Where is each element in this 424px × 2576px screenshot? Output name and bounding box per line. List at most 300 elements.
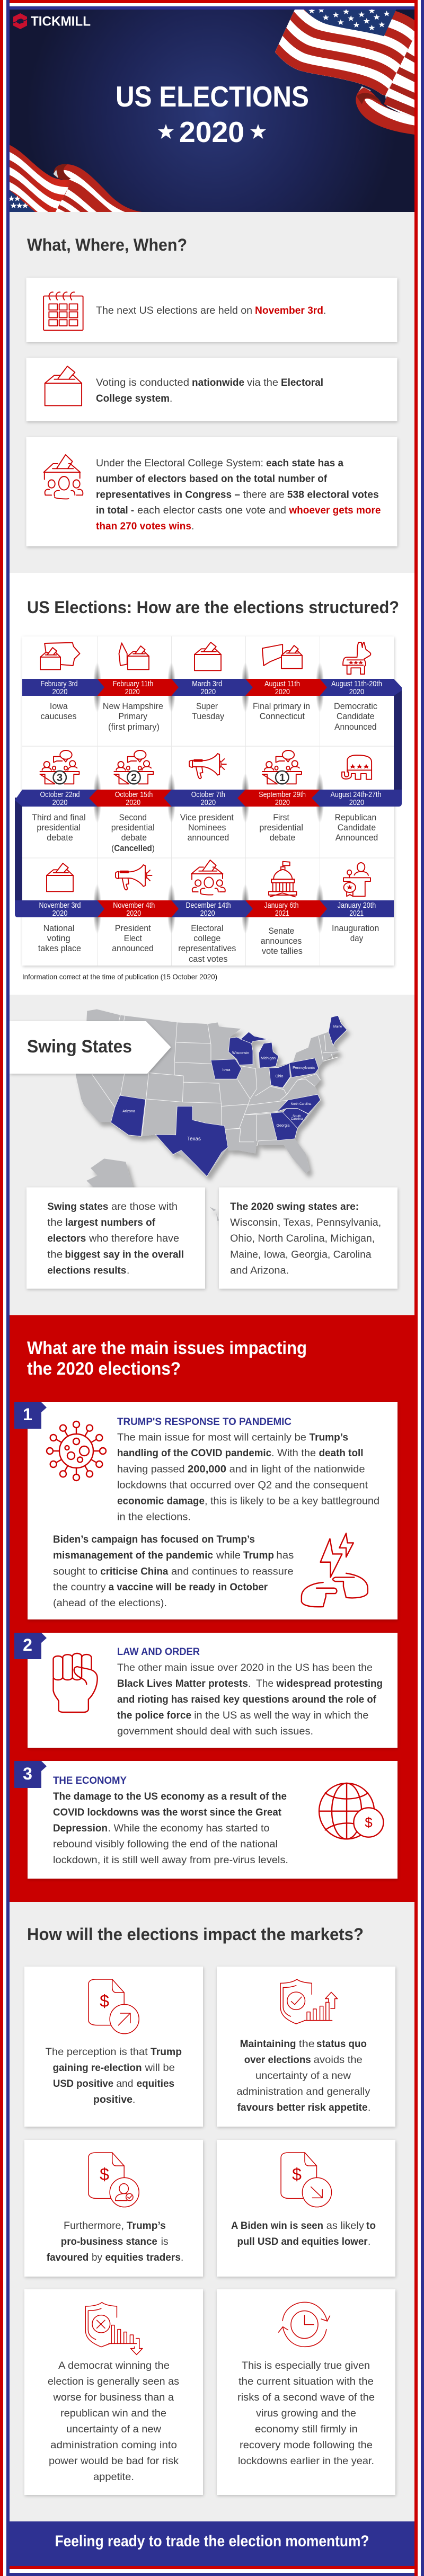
card: swing list: The 2020 swing states are: [230,1201,359,1212]
card: trump re-election: gaining re-election [53,2062,142,2074]
heading: the 2020 elections? [27,1359,181,1379]
captions: row 3: Senate [269,926,294,936]
icon: elephant [342,755,372,780]
text: Black Lives Matter protests [117,1678,248,1689]
heading: What, Where, When? [27,235,187,254]
text: and in light of the nationwide [229,1464,365,1475]
section: what where when [10,212,414,573]
map: gray states [76,1010,339,1176]
text: . With the [271,1448,316,1459]
text: and continues to reassure [171,1566,294,1577]
dates: row 1: February 3rd [40,679,77,688]
icon: capitol [269,862,297,897]
map labels: Michigan [261,1057,276,1060]
map labels: Maine [333,1025,342,1029]
number tab: 1 [23,1405,32,1424]
card: second wave: This is especially true given [242,2360,370,2371]
band: row 2 [15,790,402,807]
card: democrat win: administration coming into [50,2440,177,2451]
captions: row 1: New Hampshire [103,701,163,711]
captions: row 3: Inauguration [332,923,379,933]
icon: calendar [43,292,83,330]
dates: row 3: December 14th [186,901,231,910]
icon: third debate: 3 [57,772,63,784]
icon: Connecticut [262,644,302,669]
captions: row 2: debate [270,833,295,843]
captions: row 2: presidential [111,822,155,833]
text: The next US elections are held on [96,305,252,316]
text: lockdowns that occurred over Q2 and the consequent [117,1480,368,1491]
card: second wave: virus growing and the [256,2408,356,2419]
card: swing definition: largest numbers of [65,1217,156,1228]
card: swing definition: the [47,1217,63,1228]
captions: row 2: Second [119,812,147,822]
text: each elector casts one vote and [137,505,286,516]
card: swing definition: . [127,1265,129,1276]
card: second wave: lockdowns earlier in the year. [238,2456,374,2467]
card: swing list [219,1188,398,1289]
text: in total - [96,505,134,516]
text: economic damage [117,1496,205,1507]
captions: row 1: Connecticut [260,711,305,721]
card: status quo: favours better risk appetite [237,2102,368,2113]
text: while [216,1550,241,1561]
card: status quo: status quo [316,2039,367,2050]
dates: row 2: 2020 [201,798,216,807]
text [53,1791,288,1866]
text: The other main issue over 2020 in the US has been the [117,1662,373,1674]
text: . [323,305,326,316]
title: 2020 [179,116,244,148]
captions: row 3: announced [112,943,154,953]
icon: document down [281,2153,332,2207]
card: democrat win: election is generally seen as [48,2376,179,2387]
captions: row 3 [38,923,379,964]
card: status quo: administration and generally [236,2086,370,2097]
card: swing definition: electors [47,1233,86,1244]
dates: row 3: 2020 [126,909,141,918]
card: second wave: risks of a second wave of the [237,2392,375,2403]
captions: row 1: Tuesday [192,711,225,721]
captions: row 3: takes place [38,943,81,953]
hero banner [10,10,414,212]
text: Depression [53,1823,108,1834]
dates: row 1: August 11th-20th [331,679,382,688]
card: trump re-election: . [132,2094,135,2105]
card: democrat win: power would be bad for risk [49,2456,179,2467]
card: status quo: avoids the [314,2055,363,2066]
text [96,458,381,532]
icon: megaphone [116,865,152,890]
dates: row 2: August 24th-27th [331,790,382,799]
text: rebound visibly following the end of the national [53,1839,278,1850]
icon: globe with dollar [319,1783,383,1839]
card: swing list: and Arizona. [230,1265,289,1276]
dates: row 3: 2020 [200,909,215,918]
dates: row 2: October 7th [191,790,225,799]
card: status quo: Maintaining [240,2039,296,2050]
text: whoever gets more [288,505,381,516]
text: sought to [53,1566,98,1577]
map labels: North Carolina [291,1103,312,1106]
icon: Iowa [40,643,80,670]
icon: megaphone [189,754,226,778]
captions: row 3: National [43,923,74,933]
dates: row 2: 2020 [126,798,140,807]
text: there are [243,490,285,500]
card: pro-business: by [92,2252,102,2263]
text: has [276,1550,294,1561]
card: democrat win: A democrat winning the [58,2360,170,2371]
captions: row 1: Final primary in [253,701,310,711]
card: trump re-election: and [116,2078,133,2090]
card: biden win: . [368,2236,370,2247]
dates: row 1: 2020 [201,687,216,696]
card: pro-business: Furthermore, [64,2220,124,2232]
card: swing list: Wisconsin, Texas, Pennsylvania, [230,1217,381,1228]
captions: row 1: Candidate [337,711,374,721]
card: status quo: the [299,2039,315,2050]
map labels: Texas [187,1136,201,1142]
card: swing definition: who therefore have [89,1233,179,1244]
card: pro-business [24,2140,203,2277]
dates: row 3: November 3rd [39,901,81,910]
heading [27,1338,307,1379]
band: row 1 [22,679,402,696]
text: lockdown, it is still well away from pre-virus levels. [53,1855,288,1866]
dates: row 1: 2020 [125,687,140,696]
card: trump re-election: positive [93,2094,132,2105]
section: how are elections structured [15,598,402,981]
card: swing definition: Swing states [47,1201,108,1212]
heading: THE ECONOMY [53,1775,127,1786]
captions: row 3: Elect [124,933,142,943]
dates: row 2: 2020 [52,798,68,807]
text: Under the Electoral College System: [96,458,263,469]
card: pro-business: . [181,2252,183,2263]
text: COVID lockdowns was the worst since the Great [53,1807,282,1818]
map labels: South [293,1115,301,1118]
heading: What are the main issues impacting [27,1338,307,1358]
captions: row 1: Iowa [50,701,68,711]
card: democrat win: worse for business than a [52,2392,174,2403]
card: trump re-election [24,1967,203,2127]
text: Trump’s [310,1432,348,1444]
text [53,1432,379,1609]
card: swing list: Maine, Iowa, Georgia, Carolina [230,1250,372,1260]
icon: podium [343,863,370,896]
map [76,1010,347,1221]
dates: row 3: 2021 [275,909,289,918]
card: trump re-election: equities [137,2078,174,2090]
map labels: Iowa [223,1068,230,1072]
dates: row 1: March 3rd [192,679,222,688]
panel: issue 2 [14,1633,398,1748]
dates: row 3: January 6th [264,901,299,910]
heading: How will the elections impact the markets? [27,1925,364,1944]
dates: row 1: 2020 [52,687,68,696]
card: status quo: over elections [244,2055,311,2066]
card: biden win: A Biden win is seen [231,2220,323,2232]
dates: row 2: 2020 [349,798,364,807]
icon: globe with dollar: $ [365,1814,373,1830]
text: . [170,393,172,404]
icon: document person: $ [100,2165,109,2184]
icon: virus [47,1421,106,1481]
number tab [14,1761,47,1788]
icon: shield down [85,2303,143,2354]
icon: shield up [280,1979,338,2024]
text [117,1662,383,1737]
map labels [122,1025,342,1142]
captions: row 3: day [350,933,364,943]
section: main issues [10,1315,418,1902]
text: Biden’s campaign has focused on Trump’s [53,1534,255,1545]
captions: row 2 [32,812,378,853]
text: death toll [319,1448,364,1459]
card: second wave: the current situation with the [238,2376,374,2387]
text: mismanagement of the pandemic [53,1550,213,1561]
map labels: Carolina [291,1118,303,1121]
captions: row 2: (Cancelled) [111,843,155,853]
text: the police force [117,1710,191,1721]
title [116,80,309,148]
map labels: Pennsylvania [293,1066,315,1070]
text: Trump [243,1550,274,1561]
text: via the [247,377,278,388]
icon: second debate [114,750,153,784]
text: 200,000 [188,1464,226,1475]
captions: row 2: Announced [335,833,378,843]
card: democrat win: uncertainty of a new [66,2424,161,2435]
text: The main issue for most will certainly be [117,1432,306,1444]
dates: row 3: 2020 [52,909,68,918]
card: second wave: economy still firmly in [255,2424,358,2435]
map: swing states [111,1015,347,1176]
dates: row 2: October 22nd [40,790,80,799]
card: biden win [217,2140,395,2277]
dates: row 2: September 29th [259,790,306,799]
captions: row 2: debate [121,833,147,843]
captions: row 2: presidential [37,822,81,833]
card: swing definition: the [47,1250,63,1260]
dates: row 1: 2020 [349,687,364,696]
card: second wave [217,2289,395,2495]
captions: row 2: First [273,812,289,822]
text: , this is likely to be a key battleground [205,1496,379,1507]
captions: row 3: cast votes [189,954,228,964]
footer call to action: Feeling ready to trade the election momentum? [55,2533,369,2550]
icon: clock [279,2302,330,2347]
map labels: Ohio [276,1075,283,1078]
icon: fist [54,1653,98,1712]
text: . [191,521,194,532]
text: The damage to the US economy as a result of the [53,1791,287,1802]
text: each state has a [266,458,343,469]
card: electoral college [26,437,398,546]
text: nationwide [192,377,244,388]
footnote: Information correct at the time of publication (15 October 2020) [22,972,217,981]
text: than 270 votes wins [96,521,191,532]
text: representatives in Congress – [96,490,240,500]
text: and rioting has raised key questions around the role of [117,1694,377,1705]
captions: row 3: voting [47,933,70,943]
card: trump re-election: USD positive [53,2078,113,2090]
card: democrat win [24,2289,203,2495]
heading: TRUMP'S RESPONSE TO PANDEMIC [117,1417,292,1428]
map labels: Georgia [277,1124,290,1128]
text: number of electors based on the total number of [96,474,328,484]
text: (ahead of the elections). [53,1598,167,1609]
dates: row 2: 2020 [275,798,290,807]
heading: LAW AND ORDER [117,1646,200,1658]
panel: issue 3 [14,1761,398,1879]
text: . [248,1678,251,1689]
band: row 3 [15,900,394,917]
card: second wave: recovery mode following the [240,2440,373,2451]
timeline [15,636,402,966]
text: Voting is conducted [96,377,189,388]
dates: row 3: January 20th [338,901,376,910]
card: status quo: . [368,2102,370,2113]
card: pro-business: Trump’s [127,2220,166,2232]
icon: document down: $ [292,2165,302,2184]
dates: row 2: October 15th [115,790,153,799]
text: a vaccine will be ready in October [109,1582,268,1593]
number tab: 3 [23,1764,32,1783]
dates: row 3 [39,901,376,918]
title: US ELECTIONS [116,80,309,113]
captions: row 3: Electoral [191,923,223,933]
captions: row 1: (first primary) [108,722,160,732]
text: government should deal with such issues. [117,1726,313,1737]
card: pro-business: is [161,2236,169,2247]
icon: document up: $ [100,1991,109,2011]
card: swing definition [26,1188,205,1289]
card: trump re-election: The perception is that [46,2047,148,2058]
captions: row 1: Super [196,701,218,711]
flag: bottom left [10,145,142,212]
text: November 3rd [255,305,323,316]
captions: row 2: presidential [259,822,303,833]
text: the country [53,1582,106,1593]
card: voting [26,358,398,421]
icon: fingers pointing [302,1533,368,1607]
card: swing definition: biggest say in the overall [65,1250,184,1260]
captions: row 2: Vice president [180,812,234,822]
card: biden win: to [366,2220,376,2232]
card: election date [26,278,398,342]
captions: row 1: Announced [334,722,377,732]
text: handling of the COVID pandemic [117,1448,271,1459]
icon: New Hampshire [119,643,149,669]
icon: second debate: 2 [131,772,137,784]
dates: row 3: 2021 [349,909,364,918]
icon: document person [89,2153,139,2207]
icon: ballot box [195,642,221,670]
connector bands [15,687,402,904]
icon: first debate [262,750,302,784]
text: in the US as well the way in which the [194,1710,368,1721]
card: pro-business: favoured [47,2252,89,2263]
text: The [256,1678,273,1689]
logo: TICKMILL [31,14,91,29]
captions: row 1 [40,701,377,732]
icon: first debate: 1 [279,772,285,784]
card: swing list: Ohio, North Carolina, Michigan, [230,1233,375,1244]
captions: row 1: caucuses [40,711,76,721]
dates: row 1: February 11th [113,679,153,688]
icon: electoral college [191,860,225,895]
dates: row 1: August 11th [264,679,300,688]
text: having passed [117,1464,184,1475]
card: democrat win: appetite. [93,2472,134,2483]
map labels: Arizona [122,1110,135,1113]
flag: top right [275,10,414,135]
icon: donkey [343,642,370,674]
captions: row 2: debate [47,833,73,843]
card: swing definition: are those with [111,1201,178,1212]
card: status quo [217,1967,395,2127]
card: democrat win: republican win and the [60,2408,166,2419]
icon: ballot and people [44,455,83,499]
captions: row 3: college [193,933,220,943]
footer call to action [10,2521,414,2566]
heading: US Elections: How are the elections structured? [27,598,399,617]
card: swing definition: elections results [47,1265,126,1276]
dates: row 3: November 4th [113,901,155,910]
captions: row 3: vote tallies [262,946,303,956]
text [96,377,323,404]
map labels: Wisconsin [232,1051,249,1055]
captions: row 2: announced [188,833,229,843]
card: pro-business: pro-business stance [61,2236,157,2247]
card: trump re-election: Trump [151,2047,182,2058]
text: widespread protesting [276,1678,383,1689]
heading banner [10,1021,171,1074]
number tab [14,1402,47,1429]
captions: row 2: Candidate [338,822,376,833]
captions: row 2: Nominees [188,822,226,833]
captions: row 2: Third and final [32,812,86,822]
text: Electoral [281,377,323,388]
icon: voting ballot [47,863,73,891]
card: trump re-election: will be [144,2062,175,2074]
icon: third debate [40,750,79,784]
text: . While the economy has started to [108,1823,269,1834]
dates: row 1 [40,679,382,696]
number tab [14,1633,47,1659]
text: College system [96,393,170,404]
card: pro-business: equities traders [105,2252,181,2263]
text: criticise China [100,1566,169,1577]
text: in the elections. [117,1511,191,1523]
captions: row 3: President [115,923,151,933]
icon: document up [89,1979,139,2034]
text: 538 electoral votes [287,490,379,500]
captions: row 1: Democratic [334,701,377,711]
captions: row 3: representatives [178,943,236,953]
icon: ballot box [45,366,82,405]
number tab: 2 [23,1635,32,1654]
dates: row 2 [40,790,382,807]
heading banner: Swing States [27,1037,132,1057]
captions: row 2: Republican [335,812,376,822]
section: markets [10,1902,414,2521]
captions: row 3: announces [261,936,302,946]
card: biden win: as likely [326,2220,364,2232]
captions: row 1: Primary [119,711,148,721]
